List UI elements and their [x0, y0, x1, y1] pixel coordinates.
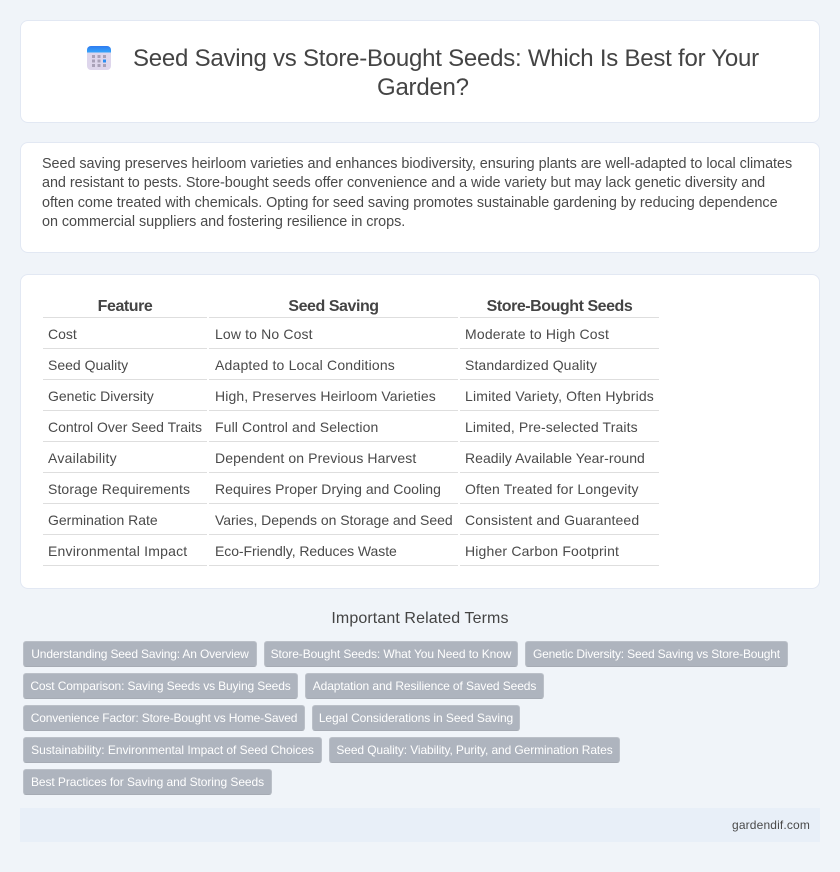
panel: comparison table — [20, 274, 820, 589]
table column: Seed Saving: Low to No Cost — [215, 326, 313, 342]
table column: Store-Bought Seeds: Store-Bought Seeds — [487, 298, 632, 315]
title: Seed Saving vs Store-Bought Seeds: Which Is Best for Your — [133, 45, 759, 72]
table column: Store-Bought Seeds: Often Treated for Longevity — [465, 481, 639, 497]
table column: Seed Saving: Varies, Depends on Storage and Seed — [215, 512, 453, 528]
table column: Seed Saving: Eco-Friendly, Reduces Waste — [215, 543, 397, 559]
table column: Seed Saving: Adapted to Local Conditions — [215, 357, 395, 373]
table column: Feature: Feature — [98, 298, 152, 315]
tag list: related terms: Understanding Seed Saving: An Overview — [31, 647, 249, 661]
table column: Store-Bought Seeds: Standardized Quality — [465, 357, 597, 373]
text block: introduction: Seed saving preserves heirloom varieties and enhances biodiversity, ensuring plants are well-adapted to local climates — [42, 156, 792, 172]
icon: calendar — [87, 46, 111, 70]
table column: Store-Bought Seeds: Readily Available Year-round — [465, 450, 645, 466]
table column: Store-Bought Seeds: Higher Carbon Footprint — [465, 543, 619, 559]
table column: Feature: Cost — [48, 326, 77, 342]
table column: Seed Saving: Full Control and Selection — [215, 419, 378, 435]
table column: Feature: Environmental Impact — [48, 543, 187, 559]
table column: Seed Saving: Requires Proper Drying and Cooling — [215, 481, 441, 497]
text block: introduction: and resistant to pests. Store-bought seeds offer convenience and a wide variety but may lack genetic diversity and — [42, 175, 765, 191]
table column: Store-Bought Seeds: Limited Variety, Often Hybrids — [465, 388, 654, 404]
text block: introduction — [42, 156, 792, 230]
text block: introduction: often come treated with chemicals. Opting for seed saving promotes sustainable gardening by reducing dependence — [42, 195, 778, 211]
tag list: related terms — [23, 641, 788, 795]
title: Garden? — [377, 74, 469, 101]
tag list: related terms: Legal Considerations in Seed Saving — [319, 711, 513, 725]
heading: related terms: Important Related Terms — [331, 610, 509, 627]
table column: Store-Bought Seeds: Moderate to High Cost — [465, 326, 609, 342]
table column: Store-Bought Seeds — [465, 298, 654, 559]
table column: Seed Saving: Dependent on Previous Harvest — [215, 450, 416, 466]
table column: Seed Saving — [215, 298, 453, 559]
tag list: related terms: Adaptation and Resilience of Saved Seeds — [313, 679, 536, 693]
tag list: related terms: Store-Bought Seeds: What You Need to Know — [271, 647, 511, 661]
tag list: related terms: Genetic Diversity: Seed Saving vs Store-Bought — [533, 647, 780, 661]
table column: Feature: Genetic Diversity — [48, 388, 154, 404]
title — [133, 45, 759, 101]
table column: Feature: Storage Requirements — [48, 481, 190, 497]
table column: Feature: Availability — [48, 450, 117, 466]
table column: Seed Saving: Seed Saving — [288, 298, 379, 315]
tag list: related terms: Sustainability: Environmental Impact of Seed Choices — [31, 743, 314, 757]
tag list: related terms: Best Practices for Saving and Storing Seeds — [31, 775, 264, 789]
table column: Seed Saving: High, Preserves Heirloom Varieties — [215, 388, 436, 404]
tag list: related terms: Convenience Factor: Store-Bought vs Home-Saved — [31, 711, 297, 725]
text block: introduction: on commercial suppliers and fostering resilience in crops. — [42, 214, 405, 230]
table column: Feature: Germination Rate — [48, 512, 158, 528]
table column: Feature — [48, 298, 202, 559]
panel: header — [20, 20, 820, 123]
table column: Feature: Control Over Seed Traits — [48, 419, 202, 435]
table column: Feature: Seed Quality — [48, 357, 128, 373]
panel: introduction — [20, 142, 820, 253]
table column: Store-Bought Seeds: Limited, Pre-selected Traits — [465, 419, 638, 435]
footer text: site name: gardendif.com — [732, 818, 810, 832]
tag list: related terms: Cost Comparison: Saving Seeds vs Buying Seeds — [30, 679, 291, 693]
tag list: related terms: Seed Quality: Viability, Purity, and Germination Rates — [336, 743, 613, 757]
footer — [20, 808, 820, 842]
table column: Store-Bought Seeds: Consistent and Guaranteed — [465, 512, 639, 528]
